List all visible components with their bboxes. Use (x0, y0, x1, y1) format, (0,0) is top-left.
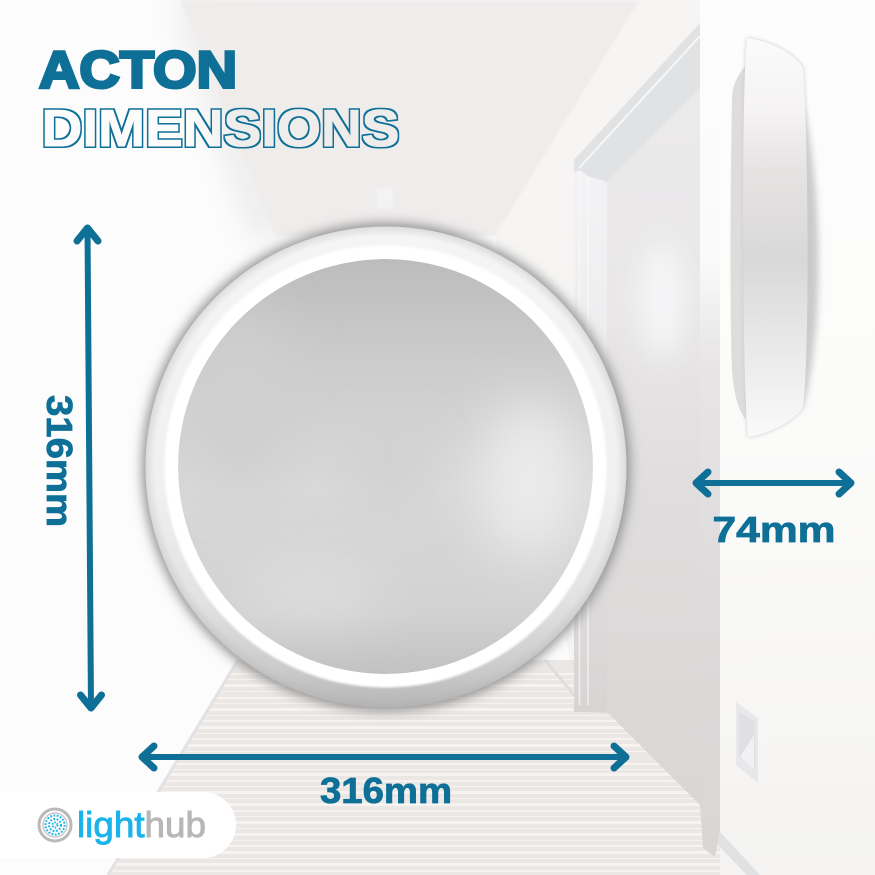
door frame jamb (574, 168, 607, 712)
side view edge shadow (743, 38, 808, 437)
arrow: depth (696, 472, 851, 494)
side view of light fitting (730, 38, 818, 437)
title line: DIMENSIONS: DIMENSIONS (42, 100, 400, 158)
lamp shadow (142, 224, 630, 710)
label: width 316mm: 316mm (320, 770, 452, 811)
logo wordmark: lighthub (77, 804, 206, 845)
door post (700, 0, 720, 857)
side view backplate (730, 65, 746, 420)
door highlight (640, 240, 684, 360)
right baseboard (718, 832, 760, 875)
logo: lighthub badge (0, 792, 236, 858)
right wall (720, 0, 875, 875)
side view body (743, 38, 808, 437)
door frame top band (574, 23, 700, 182)
side view shadow (802, 100, 818, 410)
label: depth 74mm: 74mm (712, 509, 836, 550)
main light fitting: front view (142, 224, 630, 710)
frosted lens (178, 259, 593, 674)
left wall shading (170, 0, 295, 240)
title (39, 42, 400, 158)
arrow: horizontal width (142, 746, 626, 768)
label: height 316mm: 316mm (39, 395, 80, 527)
baseboards (108, 660, 238, 875)
background: hallway (107, 0, 720, 875)
bright inner ring (164, 246, 606, 688)
door and frame (574, 0, 875, 875)
icon: lighthub roundel (39, 809, 71, 841)
outer ring (146, 226, 626, 708)
right corridor wall (495, 0, 720, 660)
wall socket plate (736, 702, 758, 783)
floor (100, 660, 740, 875)
arrow: vertical height (77, 228, 102, 708)
ceiling vent (377, 188, 393, 208)
ceiling (180, 0, 640, 236)
title line: ACTON: ACTON (39, 42, 237, 100)
